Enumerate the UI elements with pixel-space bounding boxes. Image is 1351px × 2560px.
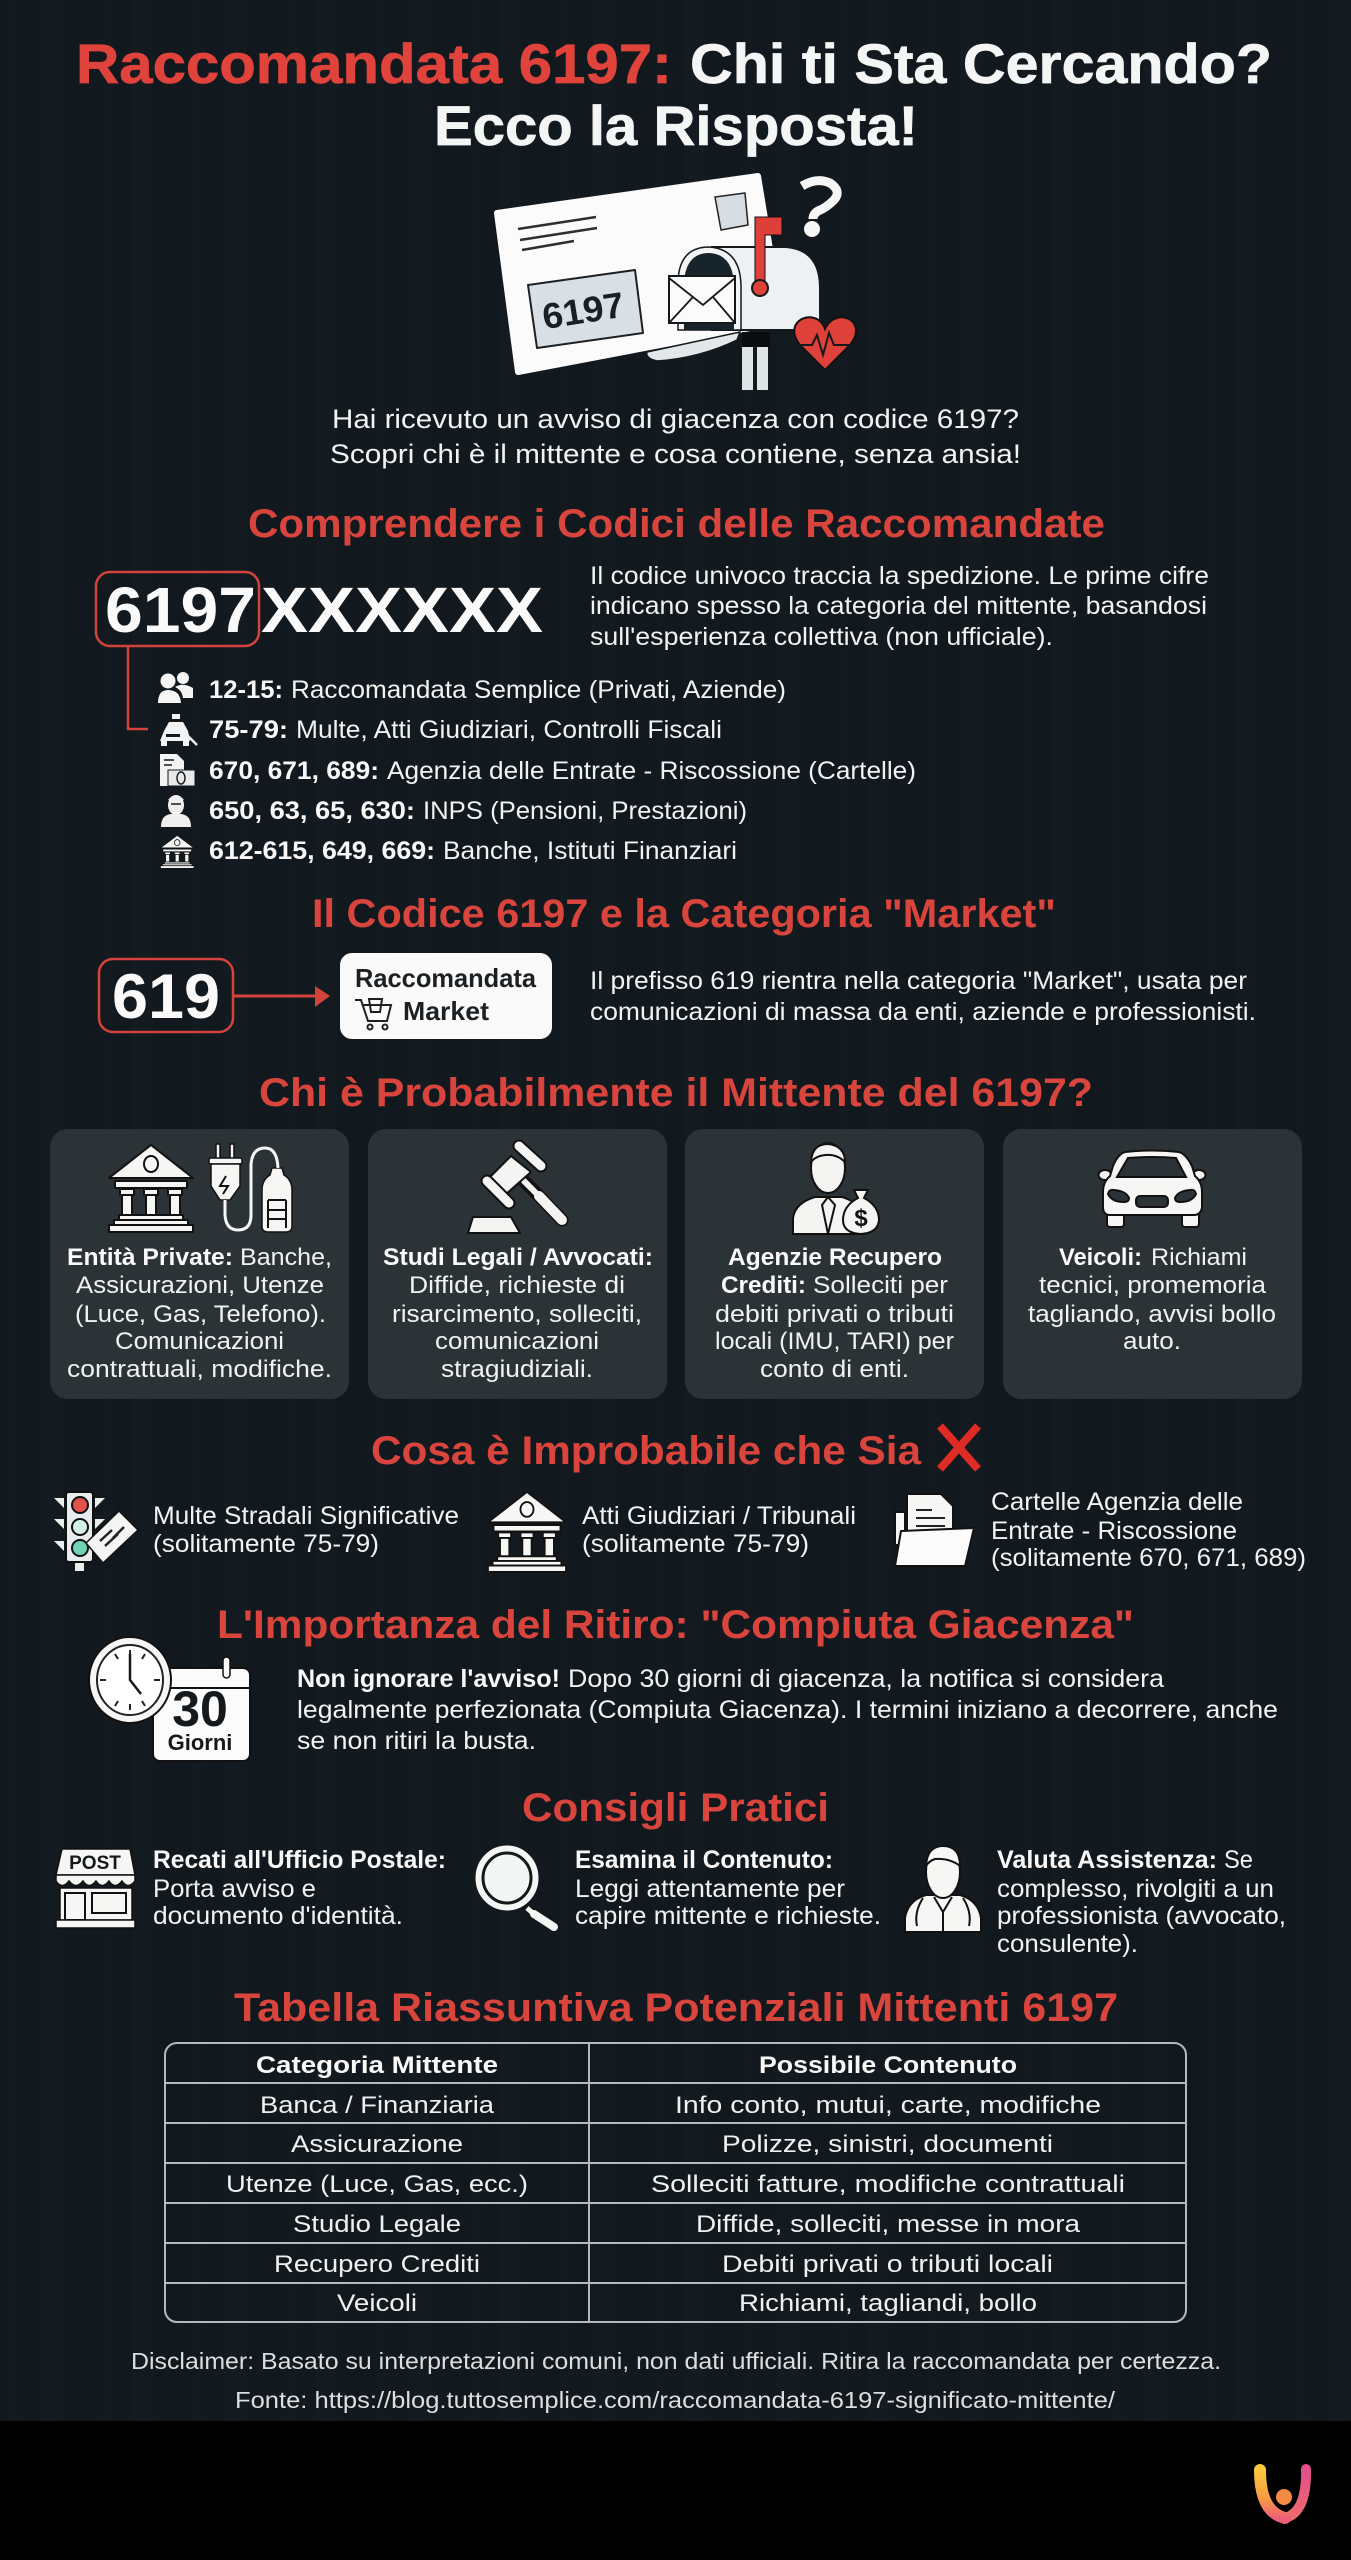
card text: Solleciti per bbox=[813, 1272, 948, 1299]
table header: Possibile Contenuto bbox=[759, 2052, 1017, 2079]
arrow bbox=[233, 986, 330, 1007]
card text: Banche, bbox=[240, 1244, 332, 1271]
text bbox=[153, 1846, 446, 1930]
card text: locali (IMU, TARI) per bbox=[715, 1328, 954, 1355]
card text bbox=[1028, 1244, 1276, 1355]
card text: risarcimento, solleciti, bbox=[392, 1301, 642, 1328]
card text: tagliando, avvisi bollo bbox=[1028, 1301, 1276, 1328]
icon: agent with money bag: $ bbox=[854, 1205, 868, 1232]
table rows: Recupero Crediti bbox=[274, 2251, 480, 2278]
market badge: Market bbox=[403, 996, 489, 1026]
table rows: Utenze (Luce, Gas, ecc.) bbox=[226, 2171, 528, 2198]
icon: tax document bbox=[160, 754, 195, 786]
icon: clock and calendar: 30 bbox=[172, 1681, 228, 1737]
text: consulente). bbox=[997, 1930, 1138, 1958]
heading: improbabile: Cosa è Improbabile che Sia bbox=[371, 1429, 922, 1473]
text: professionista (avvocato, bbox=[997, 1902, 1286, 1930]
table rows: Diffide, solleciti, messe in mora bbox=[696, 2211, 1081, 2238]
market explanation: Il prefisso 619 rientra nella categoria "Market", usata per bbox=[590, 967, 1247, 995]
list item: 12-15: 12-15: bbox=[209, 676, 283, 704]
item: multe bbox=[54, 1492, 459, 1571]
list item: 612-615 649 669 bbox=[209, 837, 737, 865]
card text bbox=[715, 1244, 954, 1383]
source: Fonte: https://blog.tuttosemplice.com/raccomandata-6197-significato-mittente/ bbox=[235, 2387, 1116, 2413]
icon: magnifier bbox=[477, 1847, 554, 1927]
text: Multe Stradali Significative bbox=[153, 1502, 459, 1530]
tip: ufficio postale bbox=[56, 1846, 446, 1930]
text: documento d'identità. bbox=[153, 1902, 403, 1930]
icon: folder bbox=[895, 1494, 974, 1566]
table rows: Studio Legale bbox=[293, 2211, 461, 2238]
table rows: Banca / Finanziaria bbox=[260, 2092, 495, 2119]
619 code box: 619 bbox=[112, 962, 220, 1032]
table header: Categoria Mittente bbox=[256, 2052, 498, 2079]
text: Valuta Assistenza: bbox=[997, 1846, 1217, 1874]
icon: question mark bbox=[802, 181, 837, 237]
disclaimer: Disclaimer: Basato su interpretazioni comuni, non dati ufficiali. Ritira la raccomandata per certezza. bbox=[131, 2348, 1221, 2374]
list item: 670 671 689: Agenzia delle Entrate - Riscossione (Cartelle) bbox=[387, 757, 916, 785]
card text: conto di enti. bbox=[760, 1356, 909, 1383]
icon: bank bbox=[109, 1145, 193, 1232]
icon: envelope with code bbox=[497, 176, 782, 372]
icon: mailbox bbox=[647, 217, 820, 390]
subtitle: Hai ricevuto un avviso di giacenza con codice 6197? bbox=[332, 404, 1019, 434]
card text bbox=[383, 1244, 653, 1383]
text: Atti Giudiziari / Tribunali bbox=[582, 1502, 856, 1530]
icon: envelope with code: 6197 bbox=[539, 284, 627, 337]
market badge bbox=[340, 953, 552, 1039]
icon: heart bbox=[788, 317, 858, 370]
card text: auto. bbox=[1123, 1328, 1181, 1355]
list item: 650 63 65 630 bbox=[209, 797, 747, 825]
text bbox=[997, 1846, 1286, 1958]
icon: clock and calendar: Giorni bbox=[168, 1730, 232, 1755]
icon: post office: POST bbox=[69, 1853, 121, 1874]
icon: police car bbox=[160, 714, 197, 746]
icon: courthouse bbox=[488, 1492, 566, 1572]
panel: entità private bbox=[50, 1129, 349, 1399]
code diagram bbox=[96, 572, 543, 729]
logo bbox=[1260, 2469, 1306, 2518]
card text: Crediti: bbox=[721, 1272, 806, 1299]
code explanation: indicano spesso la categoria del mittente, basandosi bbox=[590, 592, 1207, 620]
card text: (Luce, Gas, Telefono). bbox=[75, 1301, 326, 1328]
table rows: Richiami, tagliandi, bollo bbox=[739, 2290, 1037, 2317]
table rows: Veicoli bbox=[337, 2290, 417, 2317]
card text: tecnici, promemoria bbox=[1039, 1272, 1267, 1299]
list item: 75-79: 75-79: bbox=[209, 716, 288, 744]
text: Esamina il Contenuto: bbox=[575, 1846, 833, 1874]
list item: 612-615 649 669: Banche, Istituti Finanziari bbox=[443, 837, 737, 865]
icon: pensioner bbox=[161, 795, 191, 827]
market badge: Raccomandata bbox=[355, 963, 537, 993]
tip: esamina bbox=[477, 1846, 881, 1930]
panel: recupero crediti bbox=[685, 1129, 984, 1399]
tip: assistenza bbox=[905, 1846, 1286, 1958]
table header bbox=[256, 2052, 1017, 2079]
card text: debiti privati o tributi bbox=[715, 1301, 954, 1328]
text: Cartelle Agenzia delle bbox=[991, 1488, 1243, 1516]
icon: post office bbox=[56, 1849, 135, 1928]
card text: Studi Legali / Avvocati: bbox=[383, 1244, 653, 1271]
icon: small bank bbox=[160, 835, 194, 868]
icon: professional bbox=[905, 1846, 981, 1932]
subtitle: Scopri chi è il mittente e cosa contiene, senza ansia! bbox=[330, 439, 1021, 469]
compiuta giacenza text: Non ignorare l'avviso! bbox=[297, 1665, 560, 1693]
card text: Diffide, richieste di bbox=[409, 1272, 625, 1299]
table rows: Assicurazione bbox=[291, 2131, 463, 2158]
text: (solitamente 75-79) bbox=[582, 1530, 809, 1558]
text: Entrate - Riscossione bbox=[991, 1517, 1237, 1545]
compiuta giacenza text: se non ritiri la busta. bbox=[297, 1727, 536, 1755]
code diagram: XXXXXX bbox=[261, 574, 543, 646]
title: Ecco la Risposta! bbox=[434, 94, 918, 157]
text: complesso, rivolgiti a un bbox=[997, 1875, 1274, 1903]
code diagram: 6197 bbox=[105, 574, 256, 646]
list item: 12-15: Raccomandata Semplice (Privati, Aziende) bbox=[291, 676, 786, 704]
illustration: envelope and mailbox bbox=[497, 176, 858, 390]
table rows: Info conto, mutui, carte, modifiche bbox=[675, 2092, 1101, 2119]
code explanation: sull'esperienza collettiva (non ufficiale). bbox=[590, 623, 1053, 651]
card text: Richiami bbox=[1151, 1244, 1247, 1271]
icon: traffic light bbox=[54, 1492, 138, 1571]
table rows: Solleciti fatture, modifiche contrattuali bbox=[651, 2171, 1125, 2198]
market explanation bbox=[590, 967, 1256, 1026]
icon: plug and bottle bbox=[209, 1144, 292, 1232]
panel: veicoli bbox=[1003, 1129, 1302, 1399]
compiuta giacenza text bbox=[297, 1665, 1278, 1755]
icon: agent with money bag bbox=[793, 1143, 879, 1234]
list item: 670 671 689: 670, 671, 689: bbox=[209, 757, 379, 785]
icon: car bbox=[1098, 1150, 1206, 1227]
card text: Comunicazioni bbox=[115, 1328, 284, 1355]
subtitle bbox=[330, 404, 1021, 469]
card text: comunicazioni bbox=[435, 1328, 599, 1355]
heading: consigli: Consigli Pratici bbox=[522, 1786, 829, 1830]
table rows bbox=[226, 2092, 1125, 2317]
text: (solitamente 670, 671, 689) bbox=[991, 1544, 1306, 1572]
code explanation: Il codice univoco traccia la spedizione. Le prime cifre bbox=[590, 562, 1209, 590]
text: (solitamente 75-79) bbox=[153, 1530, 379, 1558]
title: Chi ti Sta Cercando? bbox=[690, 32, 1272, 95]
code list bbox=[158, 672, 916, 868]
title: Raccomandata 6197: bbox=[76, 32, 672, 95]
item: atti bbox=[488, 1492, 856, 1572]
card text: Agenzie Recupero bbox=[728, 1244, 942, 1271]
panel: studi legali bbox=[368, 1129, 667, 1399]
text: Recati all'Ufficio Postale: bbox=[153, 1846, 446, 1874]
heading: codici: Comprendere i Codici delle Raccomandate bbox=[248, 502, 1105, 546]
table rows: Debiti privati o tributi locali bbox=[722, 2251, 1053, 2278]
market diagram bbox=[99, 953, 552, 1039]
text bbox=[582, 1502, 856, 1558]
compiuta giacenza text: legalmente perfezionata (Compiuta Giacenza). I termini iniziano a decorrere, anche bbox=[297, 1696, 1278, 1724]
list item: 650 63 65 630: INPS (Pensioni, Prestazioni) bbox=[423, 797, 747, 825]
heading: compiuta giacenza: L'Importanza del Ritiro: "Compiuta Giacenza" bbox=[217, 1603, 1134, 1647]
card text bbox=[67, 1244, 332, 1383]
title bbox=[76, 32, 1272, 157]
heading: market: Il Codice 6197 e la Categoria "Market" bbox=[312, 892, 1056, 936]
icon: clock and calendar bbox=[89, 1637, 250, 1761]
text bbox=[991, 1488, 1306, 1572]
text: Porta avviso e bbox=[153, 1875, 316, 1903]
text bbox=[153, 1502, 459, 1558]
market explanation: comunicazioni di massa da enti, aziende e professionisti. bbox=[590, 998, 1256, 1026]
code explanation bbox=[590, 562, 1209, 651]
summary table bbox=[165, 2043, 1186, 2322]
item: cartelle bbox=[895, 1488, 1306, 1572]
icon: gavel bbox=[468, 1146, 562, 1233]
text: Se bbox=[1224, 1846, 1253, 1874]
card text: contrattuali, modifiche. bbox=[67, 1356, 332, 1383]
heading: mittente: Chi è Probabilmente il Mittente del 6197? bbox=[259, 1071, 1093, 1115]
icon: people bbox=[158, 672, 193, 703]
card text: Entità Private: bbox=[67, 1244, 233, 1271]
compiuta giacenza text: Dopo 30 giorni di giacenza, la notifica si considera bbox=[568, 1665, 1164, 1693]
list item: 75-79: Multe, Atti Giudiziari, Controlli Fiscali bbox=[296, 716, 722, 744]
card text: Veicoli: bbox=[1059, 1244, 1142, 1271]
text: Leggi attentamente per bbox=[575, 1875, 845, 1903]
table rows: Polizze, sinistri, documenti bbox=[722, 2131, 1053, 2158]
heading: tabella: Tabella Riassuntiva Potenziali Mittenti 6197 bbox=[234, 1986, 1118, 2030]
card text: stragiudiziali. bbox=[441, 1356, 593, 1383]
list item: 612-615 649 669: 612-615, 649, 669: bbox=[209, 837, 435, 865]
text: capire mittente e richieste. bbox=[575, 1902, 881, 1930]
card text: Assicurazioni, Utenze bbox=[76, 1272, 324, 1299]
text bbox=[575, 1846, 881, 1930]
list item: 650 63 65 630: 650, 63, 65, 630: bbox=[209, 797, 415, 825]
